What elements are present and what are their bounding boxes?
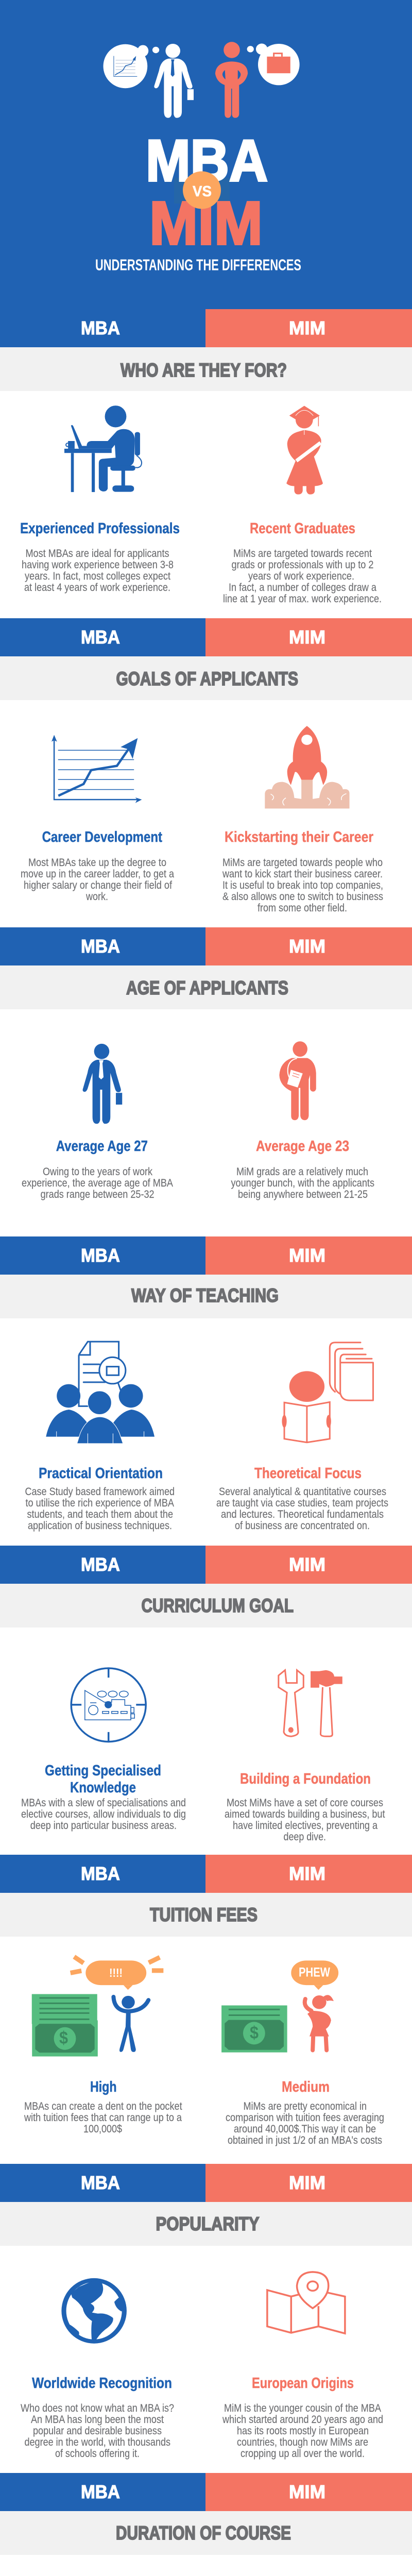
- MIM description: years of work experience.: [248, 570, 354, 582]
- MBA description: move up in the career ladder, to get a: [21, 868, 174, 880]
- MBA description: deep into particular business areas.: [30, 1820, 177, 1832]
- heading band: TUITION FEES: [150, 1904, 258, 1925]
- section: way of teaching: [0, 1236, 412, 1532]
- icon: case study group: [46, 1342, 154, 1444]
- MBA title: High: [90, 2079, 116, 2095]
- heading band: GOALS OF APPLICANTS: [116, 668, 298, 689]
- heading band: [0, 347, 412, 391]
- comparison bar: [0, 1546, 412, 1584]
- icon: target with factory: [71, 1668, 146, 1742]
- MBA description: higher salary or change their field of: [24, 879, 172, 891]
- icon: globe: [61, 2278, 127, 2344]
- comparison bar: MIM: [289, 1863, 325, 1884]
- MBA description: years. In fact, most colleges expect: [25, 570, 170, 582]
- icon: student: [279, 1041, 316, 1120]
- comparison bar: MIM: [289, 1554, 325, 1575]
- MIM description: MiM grads are a relatively much: [236, 1166, 368, 1178]
- icon: shocked man with money: [32, 1957, 163, 2057]
- MIM description: [222, 857, 383, 914]
- MIM description: deep dive.: [283, 1831, 326, 1843]
- comparison bar: MBA: [81, 1863, 120, 1884]
- MBA description: students, and teach them about the: [27, 1509, 173, 1520]
- MIM description: Most MiMs have a set of core courses: [227, 1797, 383, 1809]
- icon: professional at desk: [64, 405, 142, 492]
- MIM description: [216, 1486, 388, 1532]
- MBA description: [22, 548, 174, 594]
- comparison bar: MIM: [289, 626, 325, 648]
- heading band: [0, 1584, 412, 1628]
- icon: businessman: [83, 1044, 122, 1124]
- comparison bar: MBA: [81, 936, 120, 957]
- heading band: AGE OF APPLICANTS: [126, 977, 288, 998]
- MBA description: Who does not know what an MBA is?: [21, 2402, 174, 2414]
- MBA description: with tuition fees that can range up to a: [24, 2112, 182, 2124]
- heading band: POPULARITY: [156, 2213, 260, 2234]
- MIM description: MiM is the younger cousin of the MBA: [224, 2402, 381, 2414]
- MBA description: at least 4 years of work experience.: [24, 582, 170, 594]
- MIM description: comparison with tuition fees averaging: [226, 2112, 384, 2124]
- comparison bar: [0, 927, 412, 965]
- MIM description: countries, though now MiMs are: [237, 2436, 368, 2448]
- heading band: WAY OF TEACHING: [131, 1285, 279, 1306]
- MIM description: younger bunch, with the applicants: [231, 1177, 374, 1189]
- MIM description: Several analytical & quantitative courses: [219, 1486, 386, 1498]
- icon: shocked man with money: $: [59, 2028, 68, 2048]
- badge: vs: [183, 171, 221, 209]
- MBA description: of schools offering it.: [55, 2448, 140, 2460]
- icon: wrench and hammer: [279, 1670, 342, 1736]
- MBA description: MBAs can create a dent on the pocket: [24, 2100, 182, 2112]
- MBA description: popular and desirable business: [33, 2425, 162, 2437]
- icon: businessman: [154, 44, 194, 118]
- MBA description: Case Study based framework aimed: [25, 1486, 175, 1498]
- MIM title: Kickstarting their Career: [225, 829, 373, 845]
- MBA description: Most MBAs are ideal for applicants: [26, 548, 169, 560]
- icon: relieved woman with money: [221, 1960, 338, 2053]
- MIM description: are taught via case studies, team projects: [216, 1497, 388, 1509]
- MIM description: want to kick start their business career.: [222, 868, 383, 880]
- MIM title: European Origins: [252, 2375, 354, 2392]
- icon: graduate: [286, 406, 323, 495]
- MBA title: [45, 1762, 161, 1796]
- heading band: [0, 1275, 412, 1318]
- icon: woman figure: [215, 42, 248, 118]
- heading band: WHO ARE THEY FOR?: [121, 360, 287, 381]
- MIM description: and lectures. Theoretical fundamentals: [221, 1509, 384, 1520]
- section: goals of applicants: [0, 618, 412, 914]
- comparison bar: MBA: [81, 626, 120, 648]
- MIM description: from some other field.: [258, 902, 347, 914]
- icon: rocket: [265, 726, 350, 808]
- comparison bar: MBA: [81, 2172, 120, 2193]
- MBA description: work.: [85, 891, 108, 903]
- icon: MIM thought bubble with briefcase: [247, 44, 300, 85]
- heading band: DURATION OF COURSE: [116, 2522, 291, 2544]
- comparison bar: [0, 1236, 412, 1275]
- MBA description: elective courses, allow individuals to dig: [21, 1808, 186, 1820]
- MIM description: grads or professionals with up to 2: [232, 559, 374, 571]
- MIM description: of business are concentrated on.: [235, 1520, 370, 1532]
- comparison bar: [0, 309, 412, 347]
- heading band: [0, 965, 412, 1009]
- MBA description: An MBA has long been the most: [31, 2414, 164, 2426]
- MIM description: has its roots mostly in European: [237, 2425, 369, 2437]
- icon: MBA thought bubble with chart: [104, 44, 159, 88]
- section: curriculum goal: [0, 1546, 412, 1843]
- comparison bar: [0, 2473, 412, 2511]
- MIM description: [222, 2402, 383, 2460]
- MBA title: Practical Orientation: [39, 1465, 163, 1482]
- MIM title: Building a Foundation: [240, 1771, 371, 1787]
- MBA description: to utilise the rich experience of MBA: [26, 1497, 174, 1509]
- MIM description: [225, 1797, 385, 1843]
- comparison bar: MBA: [81, 317, 120, 338]
- MBA description: [22, 1166, 173, 1200]
- icon: reader with books: [282, 1343, 373, 1443]
- MBA description: [21, 2402, 174, 2460]
- MBA description: grads range between 25-32: [41, 1189, 154, 1200]
- comparison bar: MIM: [289, 936, 325, 957]
- icon: map with pin: [267, 2272, 345, 2333]
- MIM description: MiMs are pretty economical in: [243, 2100, 367, 2112]
- MBA title: Worldwide Recognition: [32, 2375, 172, 2392]
- MIM title: Average Age 23: [256, 1138, 349, 1155]
- section: popularity: [0, 2164, 412, 2460]
- comparison bar: MBA: [81, 2481, 120, 2502]
- MBA description: having work experience between 3-8: [22, 559, 174, 571]
- heading band: [0, 1893, 412, 1937]
- heading band: [0, 2511, 412, 2555]
- MIM description: being anywhere between 21-25: [238, 1189, 368, 1200]
- MBA description: 100,000$: [83, 2123, 122, 2135]
- panel: hero: [0, 0, 412, 309]
- vs shadow: [174, 178, 230, 204]
- comparison bar: [0, 2164, 412, 2202]
- comparison bar: MIM: [289, 1245, 325, 1266]
- MBA description: Owing to the years of work: [43, 1166, 152, 1178]
- comparison bar: [0, 618, 412, 656]
- title: MBA: MBA: [146, 128, 268, 194]
- heading band: [0, 656, 412, 700]
- MBA description: experience, the average age of MBA: [22, 1177, 173, 1189]
- icon: growth chart: [52, 735, 142, 803]
- MIM description: have limited electives, preventing a: [233, 1820, 377, 1832]
- MBA description: [25, 1486, 175, 1532]
- MIM description: [223, 548, 382, 605]
- MIM description: obtained in just 1/2 of an MBA's costs: [228, 2134, 382, 2146]
- subtitle: UNDERSTANDING THE DIFFERENCES: [95, 256, 301, 274]
- MBA description: application of business techniques.: [28, 1520, 172, 1532]
- section: who are they for: [0, 309, 412, 605]
- MIM description: It is useful to break into top companies,: [222, 879, 383, 891]
- MBA description: degree in the world, with thousands: [25, 2436, 170, 2448]
- MIM description: & also allows one to switch to business: [222, 891, 383, 903]
- comparison bar: MBA: [81, 1554, 120, 1575]
- MIM description: [231, 1166, 374, 1200]
- MIM description: line at 1 year of max. work experience.: [223, 593, 382, 605]
- MBA title: Average Age 27: [56, 1138, 148, 1155]
- comparison bar: MIM: [289, 2172, 325, 2193]
- comparison bar: MBA: [81, 1245, 120, 1266]
- section: tuition fees: [0, 1855, 412, 2146]
- MIM title: Theoretical Focus: [254, 1465, 362, 1482]
- MIM description: which started around 20 years ago and: [222, 2414, 383, 2426]
- MBA description: MBAs with a slew of specialisations and: [21, 1797, 186, 1809]
- badge: vs: VS: [193, 183, 212, 200]
- MIM title: Medium: [282, 2079, 330, 2095]
- MBA description: [24, 2100, 182, 2135]
- comparison bar: [0, 1855, 412, 1893]
- MIM title: Recent Graduates: [250, 520, 355, 537]
- MIM description: cropping up all over the world.: [241, 2448, 365, 2460]
- MBA description: Most MBAs take up the degree to: [28, 857, 166, 869]
- MBA description: [21, 857, 174, 903]
- icon: relieved woman with money: PHEW: [299, 1965, 330, 1979]
- MBA title: Getting Specialised: [45, 1762, 161, 1779]
- MBA title: Experienced Professionals: [20, 520, 180, 537]
- icon: relieved woman with money: $: [250, 2023, 259, 2043]
- section: duration of course: [0, 2473, 412, 2576]
- comparison bar: MIM: [289, 2481, 325, 2502]
- heading band: [0, 2202, 412, 2246]
- title: MIM: MIM: [149, 189, 263, 258]
- MIM description: aimed towards building a business, but: [225, 1808, 385, 1820]
- MIM description: [226, 2100, 384, 2146]
- heading band: CURRICULUM GOAL: [141, 1595, 294, 1616]
- MBA title: Career Development: [42, 829, 162, 845]
- MIM description: MiMs are targeted towards recent: [233, 548, 372, 560]
- MBA title: Knowledge: [70, 1780, 136, 1796]
- MIM description: around 40,000$.This way it can be: [234, 2123, 376, 2135]
- comparison bar: MIM: [289, 317, 325, 338]
- MBA description: [21, 1797, 186, 1832]
- MIM description: MiMs are targeted towards people who: [222, 857, 383, 869]
- icon: shocked man with money: !!!!: [109, 1966, 123, 1979]
- MIM description: In fact, a number of colleges draw a: [229, 582, 376, 594]
- section: age of applicants: [0, 927, 412, 1200]
